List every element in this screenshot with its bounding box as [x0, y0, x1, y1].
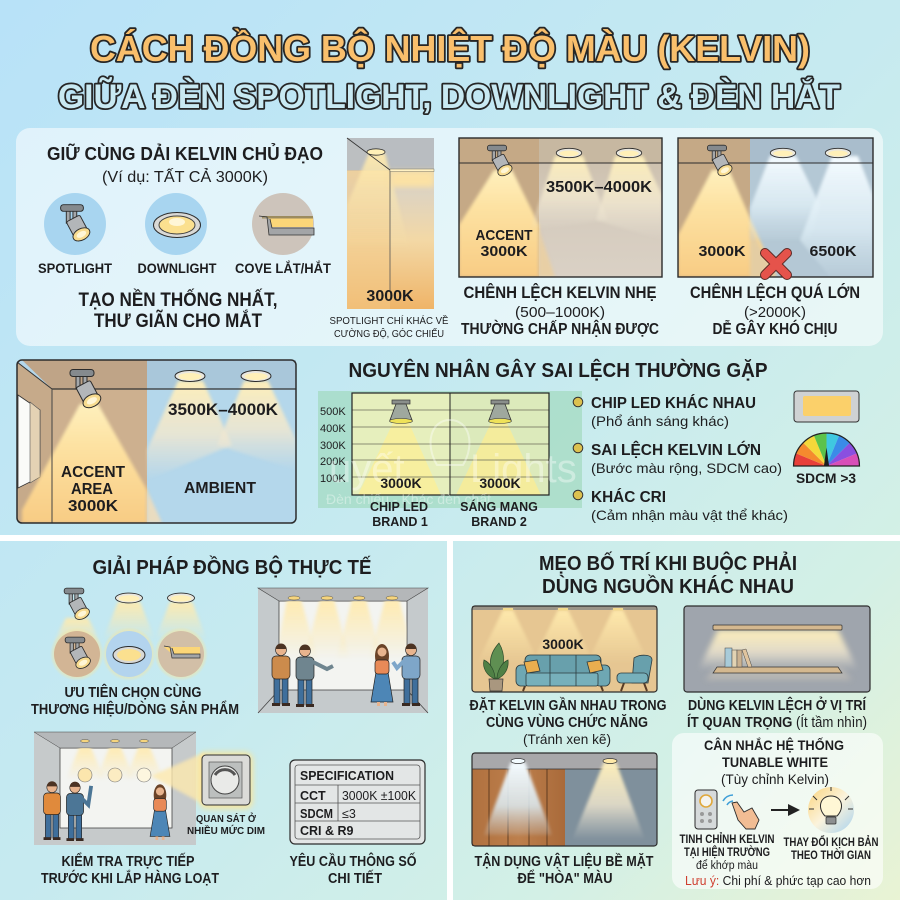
illustration: testing room before install: [34, 732, 196, 845]
white section dividers: [0, 535, 900, 900]
illustration: under-shelf lighting: [684, 606, 870, 692]
caption: tall wall: CƯỜNG ĐỘ, GÓC CHIẾU: [334, 327, 444, 340]
text: scenarios: [784, 836, 878, 862]
text: mild difference: (500–1000K): [515, 304, 605, 321]
illustration: living room 3000K: [472, 606, 657, 692]
cause: kelvin deviation: SAI LỆCH KELVIN LỚN: [591, 441, 761, 459]
text: large difference: DỄ GÂY KHÓ CHỊU: [712, 319, 838, 338]
specification table: SPECIFICATION: [300, 769, 394, 783]
axis labels: [320, 406, 346, 485]
title: [58, 27, 840, 116]
cause: chip: (Phổ ánh sáng khác): [591, 413, 729, 429]
cause: kelvin deviation: [573, 441, 782, 476]
illustration: wood and grey surfaces: [472, 753, 657, 846]
person pointing: [66, 782, 91, 841]
heading: layout tips: [539, 551, 797, 598]
heading: layout tips: DÙNG NGUỒN KHÁC NHAU: [542, 574, 794, 598]
illustration: tall wall with 3000K: [347, 138, 434, 309]
illustration: people reviewing lit room: [258, 588, 428, 713]
specification table: ≤3: [342, 807, 356, 821]
sofa: [516, 655, 610, 691]
title line 1: CÁCH ĐỒNG BỘ NHIỆT ĐỘ MÀU (KELVIN): [90, 27, 810, 69]
panel: keep same kelvin range: [16, 128, 883, 346]
heading: tunable white: CÂN NHẮC HỆ THỐNG: [704, 736, 844, 753]
watermark: Lights: [470, 447, 577, 491]
illustration: large kelvin difference: 3000K: [698, 243, 746, 260]
fixture: brand 2: [488, 400, 512, 424]
text: fine tune: TẠI HIỆN TRƯỜNG: [684, 846, 770, 859]
text: close kelvin: CÙNG VÙNG CHỨC NĂNG: [486, 713, 648, 731]
text: mild difference: THƯỜNG CHẤP NHẬN ĐƯỢC: [461, 319, 659, 338]
heading: layout tips: MẸO BỐ TRÍ KHI BUỘC PHẢI: [539, 551, 797, 575]
specification table: [290, 760, 425, 844]
axis labels: 500K: [320, 406, 346, 418]
text: close kelvin: [470, 697, 666, 747]
text: direct testing: [41, 852, 219, 887]
chart: kelvin comparison with two brands: 3000K: [479, 475, 521, 491]
text: large difference: [690, 283, 860, 338]
illustration: mild kelvin difference: ACCENT: [476, 227, 532, 244]
label: SDCM: SDCM >3: [796, 470, 856, 486]
axis labels: 100K: [320, 473, 346, 485]
cause: cri: KHÁC CRI: [591, 489, 666, 506]
armchair: [617, 655, 652, 691]
cause: chip: [573, 395, 756, 429]
text: scenarios: THAY ĐỔI KỊCH BẢN: [784, 836, 878, 849]
illustration: mild kelvin difference: 3500K–4000K: [546, 179, 653, 196]
person left: [44, 781, 60, 840]
text: offset kelvin: [687, 696, 867, 731]
text: large difference: (>2000K): [744, 304, 806, 321]
fixture: brand 1: [390, 400, 412, 424]
brand labels: [370, 499, 538, 529]
illustration: large kelvin difference: 6500K: [810, 243, 857, 260]
heading: practical solutions: GIẢI PHÁP ĐỒNG BỘ THỰC TẾ: [92, 555, 372, 579]
heading: tunable white: (Tùy chỉnh Kelvin): [721, 771, 829, 787]
illustration: accent area and ambient room: ACCENT: [61, 464, 125, 481]
illustration: mild kelvin difference: [459, 138, 662, 277]
text: direct testing: KIỂM TRA TRỰC TIẾP: [62, 852, 195, 870]
specification table: 3000K ±100K: [342, 789, 417, 803]
heading: tunable white: TUNABLE WHITE: [722, 754, 828, 770]
specification table: CCT: [300, 789, 326, 803]
icon: downlight: DOWNLIGHT: [138, 261, 217, 276]
illustration: tall wall with 3000K: 3000K: [366, 288, 414, 305]
text: offset kelvin: DÙNG KELVIN LỆCH Ở VỊ TRÍ: [688, 696, 867, 714]
axis labels: 400K: [320, 423, 346, 435]
person 4: [393, 644, 420, 706]
icon: downlight: [138, 193, 217, 276]
illustration: accent area and ambient room: AMBIENT: [184, 480, 256, 497]
brand labels: BRAND 2: [471, 515, 527, 529]
text: fine tune: [680, 833, 774, 872]
icon: cove light: COVE LẮT/HẮT: [235, 261, 332, 276]
text: scenarios: THEO THỜI GIAN: [791, 849, 871, 862]
caption: dim levels: [187, 812, 265, 837]
books: [725, 648, 752, 667]
text: surface materials: TẬN DỤNG VẬT LIỆU BỀ MẶT: [474, 852, 654, 870]
icon: spotlight: SPOTLIGHT: [38, 261, 113, 276]
illustration: large kelvin difference: [678, 138, 873, 277]
text: fine tune: để khớp màu: [696, 860, 758, 872]
chart box: [352, 393, 549, 495]
person 3: [371, 644, 393, 706]
plant: [484, 643, 508, 691]
heading: common causes: NGUYÊN NHÂN GÂY SAI LỆCH THƯỜNG GẶP: [348, 358, 768, 382]
text: close kelvin: (Tránh xen kẽ): [523, 731, 611, 747]
person 2: [296, 644, 333, 707]
specification table: SDCM: [300, 807, 333, 821]
icon: remote: [695, 790, 717, 829]
text: unified and relaxing: [78, 289, 278, 332]
heading: same kelvin: GIỮ CÙNG DẢI KELVIN CHỦ ĐẠO: [47, 143, 323, 164]
caption: dim levels: NHIỀU MỨC DIM: [187, 824, 265, 837]
woman: [150, 784, 170, 840]
brand labels: CHIP LED: [370, 500, 428, 514]
text: fine tune: TINH CHỈNH KELVIN: [680, 833, 774, 846]
text: close kelvin: ĐẶT KELVIN GẦN NHAU TRONG: [470, 697, 666, 714]
cause: kelvin deviation: (Bước màu rộng, SDCM cao): [591, 460, 782, 476]
icon: LED chip: [794, 391, 859, 422]
illustration: accent area and ambient room: [17, 360, 296, 523]
solution: same brand product line: THƯƠNG HIỆU/DÒNG SẢN PHẨM: [31, 700, 239, 718]
specification table: CRI & R9: [300, 824, 354, 838]
heading: same kelvin: [47, 143, 323, 186]
icon: dimmer switch with beam: [151, 752, 253, 809]
illustration: living room 3000K: 3000K: [542, 636, 584, 652]
watermark: Đèn chiếu - Khác đèn chất: [326, 491, 491, 507]
watermark: uyết: [329, 447, 405, 491]
text: offset kelvin: ÍT QUAN TRỌNG (Ít tầm nhìn): [687, 714, 867, 731]
panel: tunable white: [672, 733, 883, 889]
icon: bulb: [808, 787, 854, 833]
caption: dim levels: QUAN SÁT Ở: [196, 812, 256, 825]
text: detailed specs: CHI TIẾT: [328, 870, 382, 887]
chart: kelvin comparison with two brands: [318, 391, 582, 529]
text: direct testing: TRƯỚC KHI LẮP HÀNG LOẠT: [41, 869, 219, 887]
icon: cove light: [235, 193, 332, 276]
heading: same kelvin: (Ví dụ: TẤT CẢ 3000K): [102, 167, 268, 186]
icon: red cross: [765, 253, 787, 275]
illustration: accent area and ambient room: AREA: [71, 481, 113, 498]
cause: cri: (Cảm nhận màu vật thể khác): [591, 507, 788, 523]
solution: same brand product line: [31, 588, 239, 718]
caption: tall wall: [330, 314, 448, 340]
brand labels: BRAND 1: [372, 515, 428, 529]
illustration: mild kelvin difference: 3000K: [480, 243, 528, 260]
text: mild difference: [461, 283, 659, 338]
chart: kelvin comparison with two brands: 3000K: [380, 475, 422, 491]
title line 2: GIỮA ĐÈN SPOTLIGHT, DOWNLIGHT & ĐÈN HẮT: [58, 78, 840, 116]
cause: chip: CHIP LED KHÁC NHAU: [591, 395, 756, 412]
icon: SDCM rainbow gauge: [794, 433, 859, 466]
text: surface materials: [474, 852, 654, 887]
axis labels: 200K: [320, 456, 346, 468]
cause: cri: [573, 489, 788, 523]
axis labels: 300K: [320, 440, 346, 452]
text: mild difference: CHÊNH LỆCH KELVIN NHẸ: [464, 283, 656, 302]
caption: tall wall: SPOTLIGHT CHÍ KHÁC VỀ: [330, 314, 448, 327]
text: detailed specs: [290, 852, 416, 887]
note: Lưu ý: Chi phí & phức tạp cao hơn: [685, 873, 871, 888]
illustration: accent area and ambient room: 3500K–4000K: [168, 400, 279, 419]
text: large difference: CHÊNH LỆCH QUÁ LỚN: [690, 283, 860, 302]
text: detailed specs: YÊU CẦU THÔNG SỐ: [290, 852, 416, 870]
icon: spotlight: [38, 193, 113, 276]
solution: same brand product line: ƯU TIÊN CHỌN CÙNG: [64, 683, 202, 701]
text: unified and relaxing: THƯ GIÃN CHO MẮT: [94, 310, 262, 332]
text: unified and relaxing: TẠO NỀN THỐNG NHẤT,: [78, 289, 278, 311]
text: surface materials: ĐỂ "HÒA" MÀU: [518, 869, 612, 887]
brand labels: SÁNG MANG: [460, 499, 538, 514]
person 1: [272, 644, 290, 706]
arrow: [771, 804, 800, 816]
heading: tunable white: [704, 736, 844, 787]
icon: hand tap: [723, 795, 759, 829]
watermark background: [318, 391, 582, 508]
list: causes: [573, 395, 788, 523]
watermark: [326, 420, 577, 507]
illustration: accent area and ambient room: 3000K: [68, 498, 118, 515]
